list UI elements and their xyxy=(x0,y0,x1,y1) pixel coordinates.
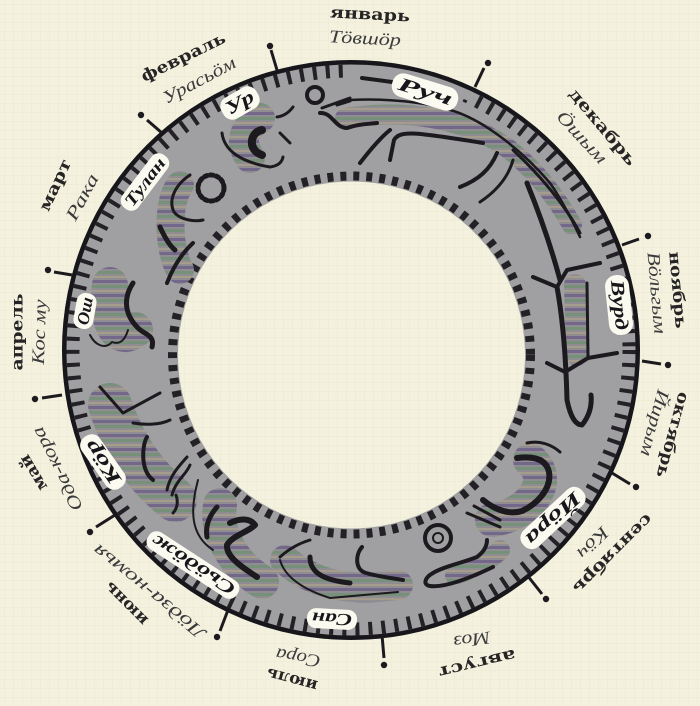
figure: lizard (November) xyxy=(527,183,617,425)
pin: August xyxy=(527,575,549,602)
name: Кöр: Кöр xyxy=(80,435,127,490)
name: Ош: Ош xyxy=(73,296,97,326)
name: Сан xyxy=(307,608,357,630)
figure: bird (October) xyxy=(425,442,560,586)
figure: bird (August) xyxy=(280,540,403,598)
pin: April xyxy=(32,395,62,402)
month: январь: Тöвшöр xyxy=(329,26,401,50)
month: март: март xyxy=(35,156,75,214)
month: июль: Сора xyxy=(274,644,322,672)
figure: animal (February) xyxy=(222,107,293,167)
month: декабрь xyxy=(553,85,641,170)
pin: March xyxy=(45,267,72,275)
name: Вурд: Вурд xyxy=(606,278,632,331)
name: Вурд xyxy=(604,274,634,336)
name: Йöра xyxy=(516,483,591,554)
name: Тулан xyxy=(117,150,173,214)
gaps in tick band xyxy=(345,71,478,96)
month: ноябрь: ноябрь xyxy=(665,251,691,329)
month: август xyxy=(436,627,518,682)
month: февраль: Урасьöм xyxy=(159,52,240,108)
month: ноябрь: Вöльгым xyxy=(643,251,671,335)
figure: beast (June) xyxy=(193,480,257,577)
name: Ош xyxy=(72,292,98,330)
ring name labels xyxy=(72,71,634,630)
month: апрель xyxy=(8,293,50,370)
pin: September xyxy=(612,473,639,490)
month: июль: июль xyxy=(264,664,320,696)
month: сентябрь: Кöч xyxy=(573,522,614,563)
pin: November xyxy=(622,233,651,245)
ring band xyxy=(62,60,640,640)
name: Сан: Сан xyxy=(312,608,352,630)
calendar ring xyxy=(62,60,640,640)
name: Ур: Ур xyxy=(222,86,258,120)
pin: July xyxy=(381,635,387,668)
pin: January xyxy=(267,43,277,70)
month: май: май xyxy=(15,451,51,495)
figure: dog (January) xyxy=(307,78,580,237)
name: Руч xyxy=(389,71,461,113)
month: февраль xyxy=(137,28,240,108)
month: январь: январь xyxy=(330,2,411,26)
month: октябрь: октябрь xyxy=(652,390,694,480)
month: сентябрь: сентябрь xyxy=(569,510,657,598)
month: декабрь: Öшым xyxy=(553,106,612,168)
pin: May xyxy=(87,515,115,535)
month: октябрь xyxy=(636,386,694,480)
month: ноябрь xyxy=(643,251,691,335)
pin: December xyxy=(475,60,491,87)
pin: October xyxy=(642,361,671,368)
month: июнь xyxy=(88,540,211,645)
name: Руч: Руч xyxy=(393,73,455,110)
striped shading xyxy=(109,115,577,587)
month: июль xyxy=(264,644,322,696)
month: январь xyxy=(329,2,411,50)
month: декабрь: декабрь xyxy=(565,85,641,170)
name: Ур xyxy=(217,83,263,123)
month: июнь: июнь xyxy=(100,578,152,630)
pin: February xyxy=(138,112,162,133)
name: Йöра: Йöра xyxy=(520,486,588,551)
month: май: Ода-кора xyxy=(27,423,87,515)
figure: animal (April) xyxy=(90,283,153,347)
month: август: август xyxy=(436,646,518,682)
figure: animal (May) xyxy=(100,387,190,513)
name: Тулан: Тулан xyxy=(121,154,169,210)
month: март xyxy=(35,156,103,225)
month: октябрь: Йирым xyxy=(636,386,676,460)
month: апрель: апрель xyxy=(8,293,26,370)
month: июнь: Лöдза-номья xyxy=(88,540,211,645)
figure: animal and sun (March) xyxy=(160,175,224,283)
month: апрель: Кос му xyxy=(28,299,50,366)
name: Кöр xyxy=(76,430,130,494)
month: май xyxy=(15,423,87,515)
name: Сьöдöж: Сьöдöж xyxy=(147,530,239,600)
pin: June xyxy=(214,610,228,640)
month: февраль: февраль xyxy=(137,28,229,86)
month: август: Моз xyxy=(452,627,493,652)
month: март: Рака xyxy=(61,170,103,225)
name: Сьöдöж xyxy=(143,528,243,602)
